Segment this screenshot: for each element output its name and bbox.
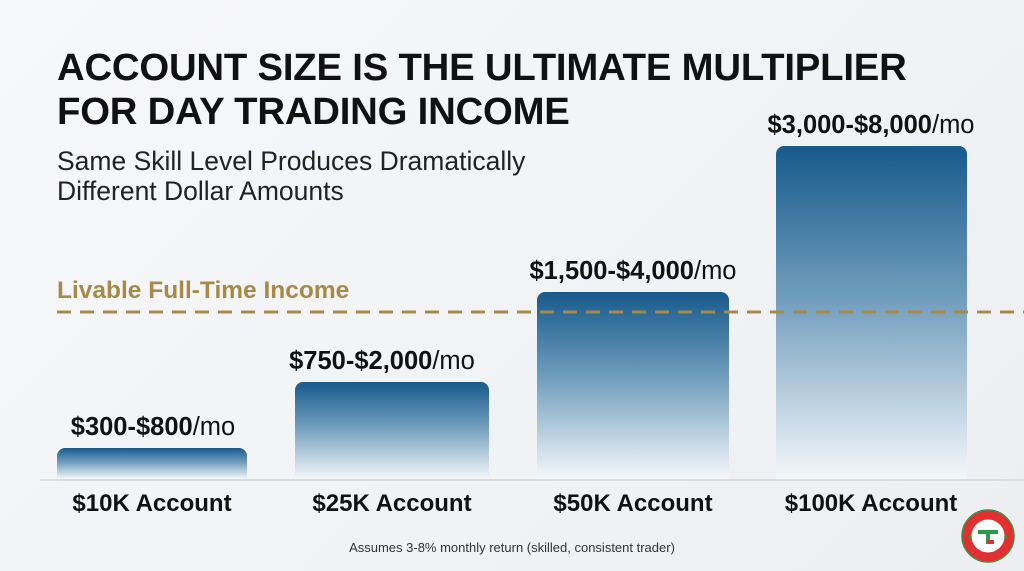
- label: 100K: $100K Account: [785, 490, 957, 517]
- subtitle: Different Dollar Amounts: [57, 176, 344, 206]
- label: 25K: $25K Account: [312, 490, 472, 517]
- subtitle: Same Skill Level Produces Dramatically: [57, 146, 525, 176]
- value: 10K: $300-$800/mo: [71, 413, 235, 441]
- label: 50K: $50K Account: [553, 490, 713, 517]
- value: 100K: $3,000-$8,000/mo: [768, 111, 974, 139]
- label: 10K: $10K Account: [72, 490, 232, 517]
- value: 50K: $1,500-$4,000/mo: [530, 257, 736, 285]
- bar: 25K: [295, 382, 489, 479]
- subtitle: [57, 146, 526, 206]
- title: FOR DAY TRADING INCOME: [57, 90, 570, 133]
- footnote: Assumes 3-8% monthly return (skilled, consistent trader): [349, 540, 675, 555]
- bar: 10K: [57, 448, 247, 479]
- title: ACCOUNT SIZE IS THE ULTIMATE MULTIPLIER: [57, 46, 907, 89]
- baseline: [40, 479, 1024, 481]
- icon: logo: [961, 509, 1015, 563]
- icon: logo: ★: [967, 533, 973, 541]
- dashed livable line: [57, 310, 1024, 314]
- bar: 100K: [776, 146, 967, 479]
- icon: logo: ★: [1003, 533, 1009, 541]
- value: 25K: $750-$2,000/mo: [289, 347, 475, 375]
- title: [57, 46, 907, 133]
- bar: 50K: [537, 292, 729, 479]
- livable income label: Livable Full-Time Income: [57, 277, 349, 304]
